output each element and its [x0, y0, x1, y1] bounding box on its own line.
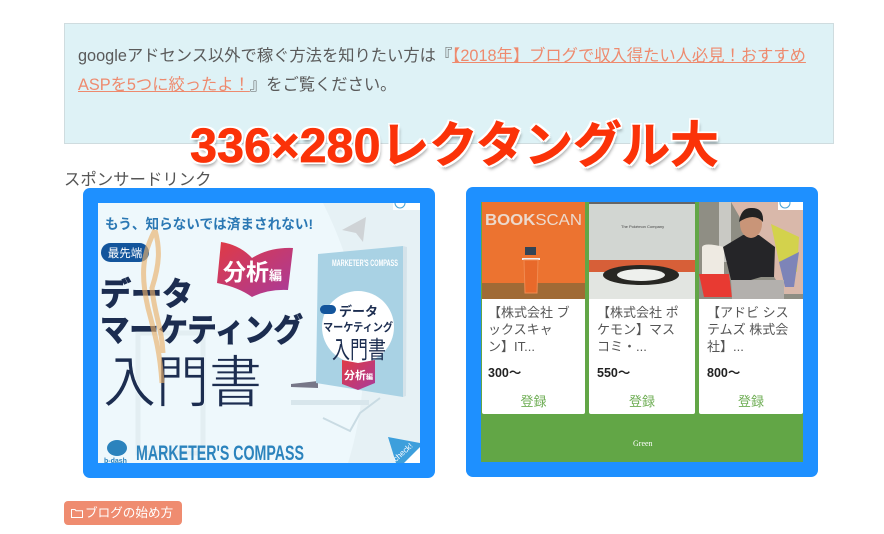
book cover: 入門書 [332, 337, 386, 364]
overlay title: 336×280レクタングル大 [190, 119, 719, 173]
card text: Bookscan: ン】IT... [488, 339, 535, 354]
panel: right ad frame [466, 187, 818, 477]
check corner [388, 437, 420, 463]
green logo: Green [633, 439, 653, 448]
card text: Adobe: 社】... [707, 339, 744, 354]
badge: 最先端 [101, 243, 149, 262]
open book: 分析編 [217, 242, 293, 297]
green ad background [481, 202, 803, 462]
ad headline: もう、知らないでは済まされない! [105, 216, 313, 232]
icon: folder [71, 509, 83, 518]
note text: googleアドセンス以外で稼ぐ方法を知りたい方は『【2018年】ブログで収入得たい人必見！おすすめ [78, 47, 806, 65]
check corner: check! [391, 441, 415, 463]
card text: Pokemon: 【株式会社 ポ [597, 305, 679, 320]
card text: Bookscan: 【株式会社 ブ [488, 305, 570, 320]
card text: Bookscan: ックスキャ [488, 322, 553, 337]
card text: Pokemon: コミ・... [597, 339, 647, 354]
card text: Adobe [699, 299, 803, 414]
card photo: Bookscan [482, 202, 585, 299]
card text: Adobe: 800〜 [707, 366, 740, 380]
open book: 分析編: 分析編 [223, 259, 282, 285]
card text: Adobe: 登録 [738, 394, 764, 409]
card text: Bookscan [482, 299, 585, 414]
book cover [291, 246, 407, 397]
card text: Pokemon [589, 299, 695, 414]
category tag: ブログの始め方 [85, 506, 173, 520]
card text: Pokemon: ケモン】マス [597, 322, 675, 337]
book cover: マーケティング [323, 320, 393, 334]
card photo: Pokemon [589, 202, 695, 299]
ad title: データ [100, 276, 193, 312]
card text: Pokemon: 550〜 [597, 366, 630, 380]
brand footer [104, 440, 304, 465]
card text: Adobe: テムズ 株式会 [707, 322, 788, 337]
badge: 最先端: 最先端 [108, 246, 143, 260]
graph decoration [323, 398, 380, 431]
left ad creative [98, 203, 420, 463]
orange scribble [144, 230, 163, 383]
card photo: Pokemon: The Pokémon Company [621, 224, 664, 229]
ad title: 入門書 [103, 351, 262, 414]
ad choices [393, 198, 420, 210]
book cover: 分析編 [344, 368, 373, 382]
card text: Adobe: 【アドビ シス [707, 305, 789, 320]
card text: Bookscan: 300〜 [488, 366, 521, 380]
sponsored link label: スポンサードリンク [64, 171, 212, 189]
card photo: Adobe [699, 202, 803, 299]
ad title: マーケティング [100, 312, 303, 348]
card text: Bookscan: 登録 [520, 394, 546, 409]
book cover: データ [339, 304, 378, 319]
note text: ASPを5つに絞ったよ！』をご覧ください。 [78, 76, 396, 94]
note text [78, 46, 806, 94]
category tag [64, 501, 182, 525]
ad title [100, 276, 303, 414]
panel: note box [64, 23, 834, 144]
panel: left ad frame [83, 188, 435, 478]
card text: Pokemon: 登録 [629, 394, 655, 409]
card photo: Bookscan: BOOKSCAN [485, 212, 582, 229]
